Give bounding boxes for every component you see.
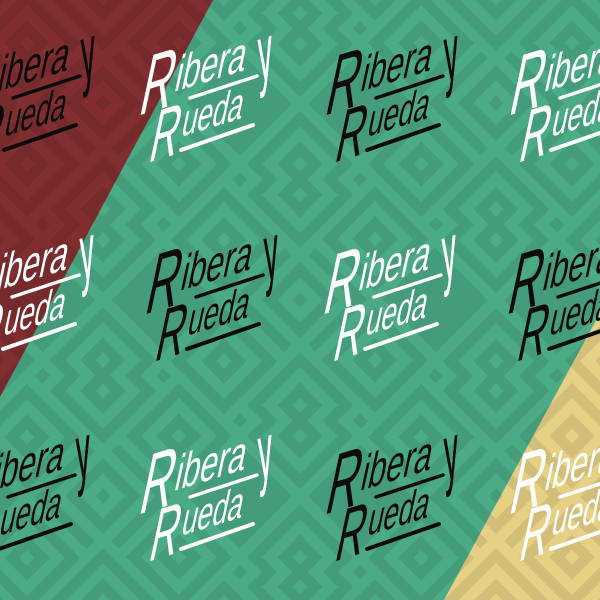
logo: row 3 column 2 white: R: [133, 428, 186, 535]
logo: row 3 column 3 black: R: [319, 428, 372, 535]
logo: row 2 column 3 white: ueda: [362, 276, 434, 347]
logo: row 3 column 4 white: R: [503, 428, 556, 535]
logo: row 2 column 3 white: R: [327, 286, 374, 379]
logo: row 3 column 2 white: ibera: [171, 424, 254, 503]
logo: row 3 column 2 white: y: [256, 405, 274, 498]
logo: row 3 column 3 black: ueda: [364, 476, 436, 547]
logo: row 1 column 2 white: R: [143, 87, 190, 180]
logo: row 1 column 3 black: ueda: [364, 77, 436, 148]
logo: row 2 column 2 black: ueda: [184, 276, 256, 347]
logo: row 1 column 1 black: [0, 6, 97, 180]
logo: row 2 column 2 black: [139, 205, 280, 379]
logo: row 1 column 2 white: R: [133, 29, 186, 136]
logo: row 1 column 1 black: ueda: [1, 77, 73, 148]
logo: row 2 column 2 black: ibera: [177, 224, 260, 303]
logo: row 2 column 1 white: y: [78, 205, 96, 298]
logo: row 2 column 2 black: R: [139, 228, 192, 335]
logo: row 1 column 2 white: y: [256, 6, 274, 99]
logo: row 3 column 3 black: [319, 405, 460, 579]
logo: row 1 column 3 black: R: [319, 29, 372, 136]
logo: row 3 column 3 black: R: [329, 486, 376, 579]
logo: row 2 column 1 white: ueda: [0, 276, 72, 347]
logo: row 2 column 3 white: R: [317, 228, 370, 335]
logo: row 1 column 4 white: [503, 6, 600, 180]
logo: row 1 column 1 black: y: [79, 6, 97, 99]
logo: row 3 column 4 white: [503, 405, 600, 579]
logo: row 3 column 1 black: [0, 405, 92, 579]
logo: row 1 column 2 white: ibera: [171, 25, 254, 104]
logo: row 1 column 2 white: [133, 6, 274, 180]
logo: row 3 column 4 white: R: [513, 486, 560, 579]
logo: row 1 column 4 white: R: [503, 29, 556, 136]
logo: row 2 column 3 white: y: [440, 205, 458, 298]
logo: row 2 column 3 white: [317, 205, 458, 379]
logo: row 2 column 3 white: ibera: [355, 224, 438, 303]
background: yellow wedge bottom-right: [444, 313, 600, 600]
logo: row 3 column 2 white: R: [143, 486, 190, 579]
logo: row 3 column 3 black: ibera: [357, 424, 440, 503]
logo: row 2 column 2 black: y: [262, 205, 280, 298]
logo: row 2 column 4 black: R: [501, 228, 554, 335]
logo: row 1 column 3 black: [319, 6, 460, 180]
logo: row 1 column 3 black: R: [329, 87, 376, 180]
logo: row 2 column 1 white: [0, 205, 96, 379]
logo: row 2 column 4 black: [501, 205, 600, 379]
logo: row 3 column 2 white: [133, 405, 274, 579]
logo: row 1 column 4 white: R: [513, 87, 560, 180]
logo: row 1 column 3 black: y: [442, 6, 460, 99]
logo: row 3 column 1 black: y: [74, 405, 92, 498]
logo: row 2 column 4 black: R: [511, 286, 558, 379]
logo: row 1 column 2 white: ueda: [178, 77, 250, 148]
logo: row 3 column 2 white: ueda: [178, 476, 250, 547]
logo: row 1 column 3 black: ibera: [357, 25, 440, 104]
logo: row 3 column 3 black: y: [442, 405, 460, 498]
logo: row 2 column 2 black: R: [149, 286, 196, 379]
background: red wedge top-left: [0, 0, 213, 397]
